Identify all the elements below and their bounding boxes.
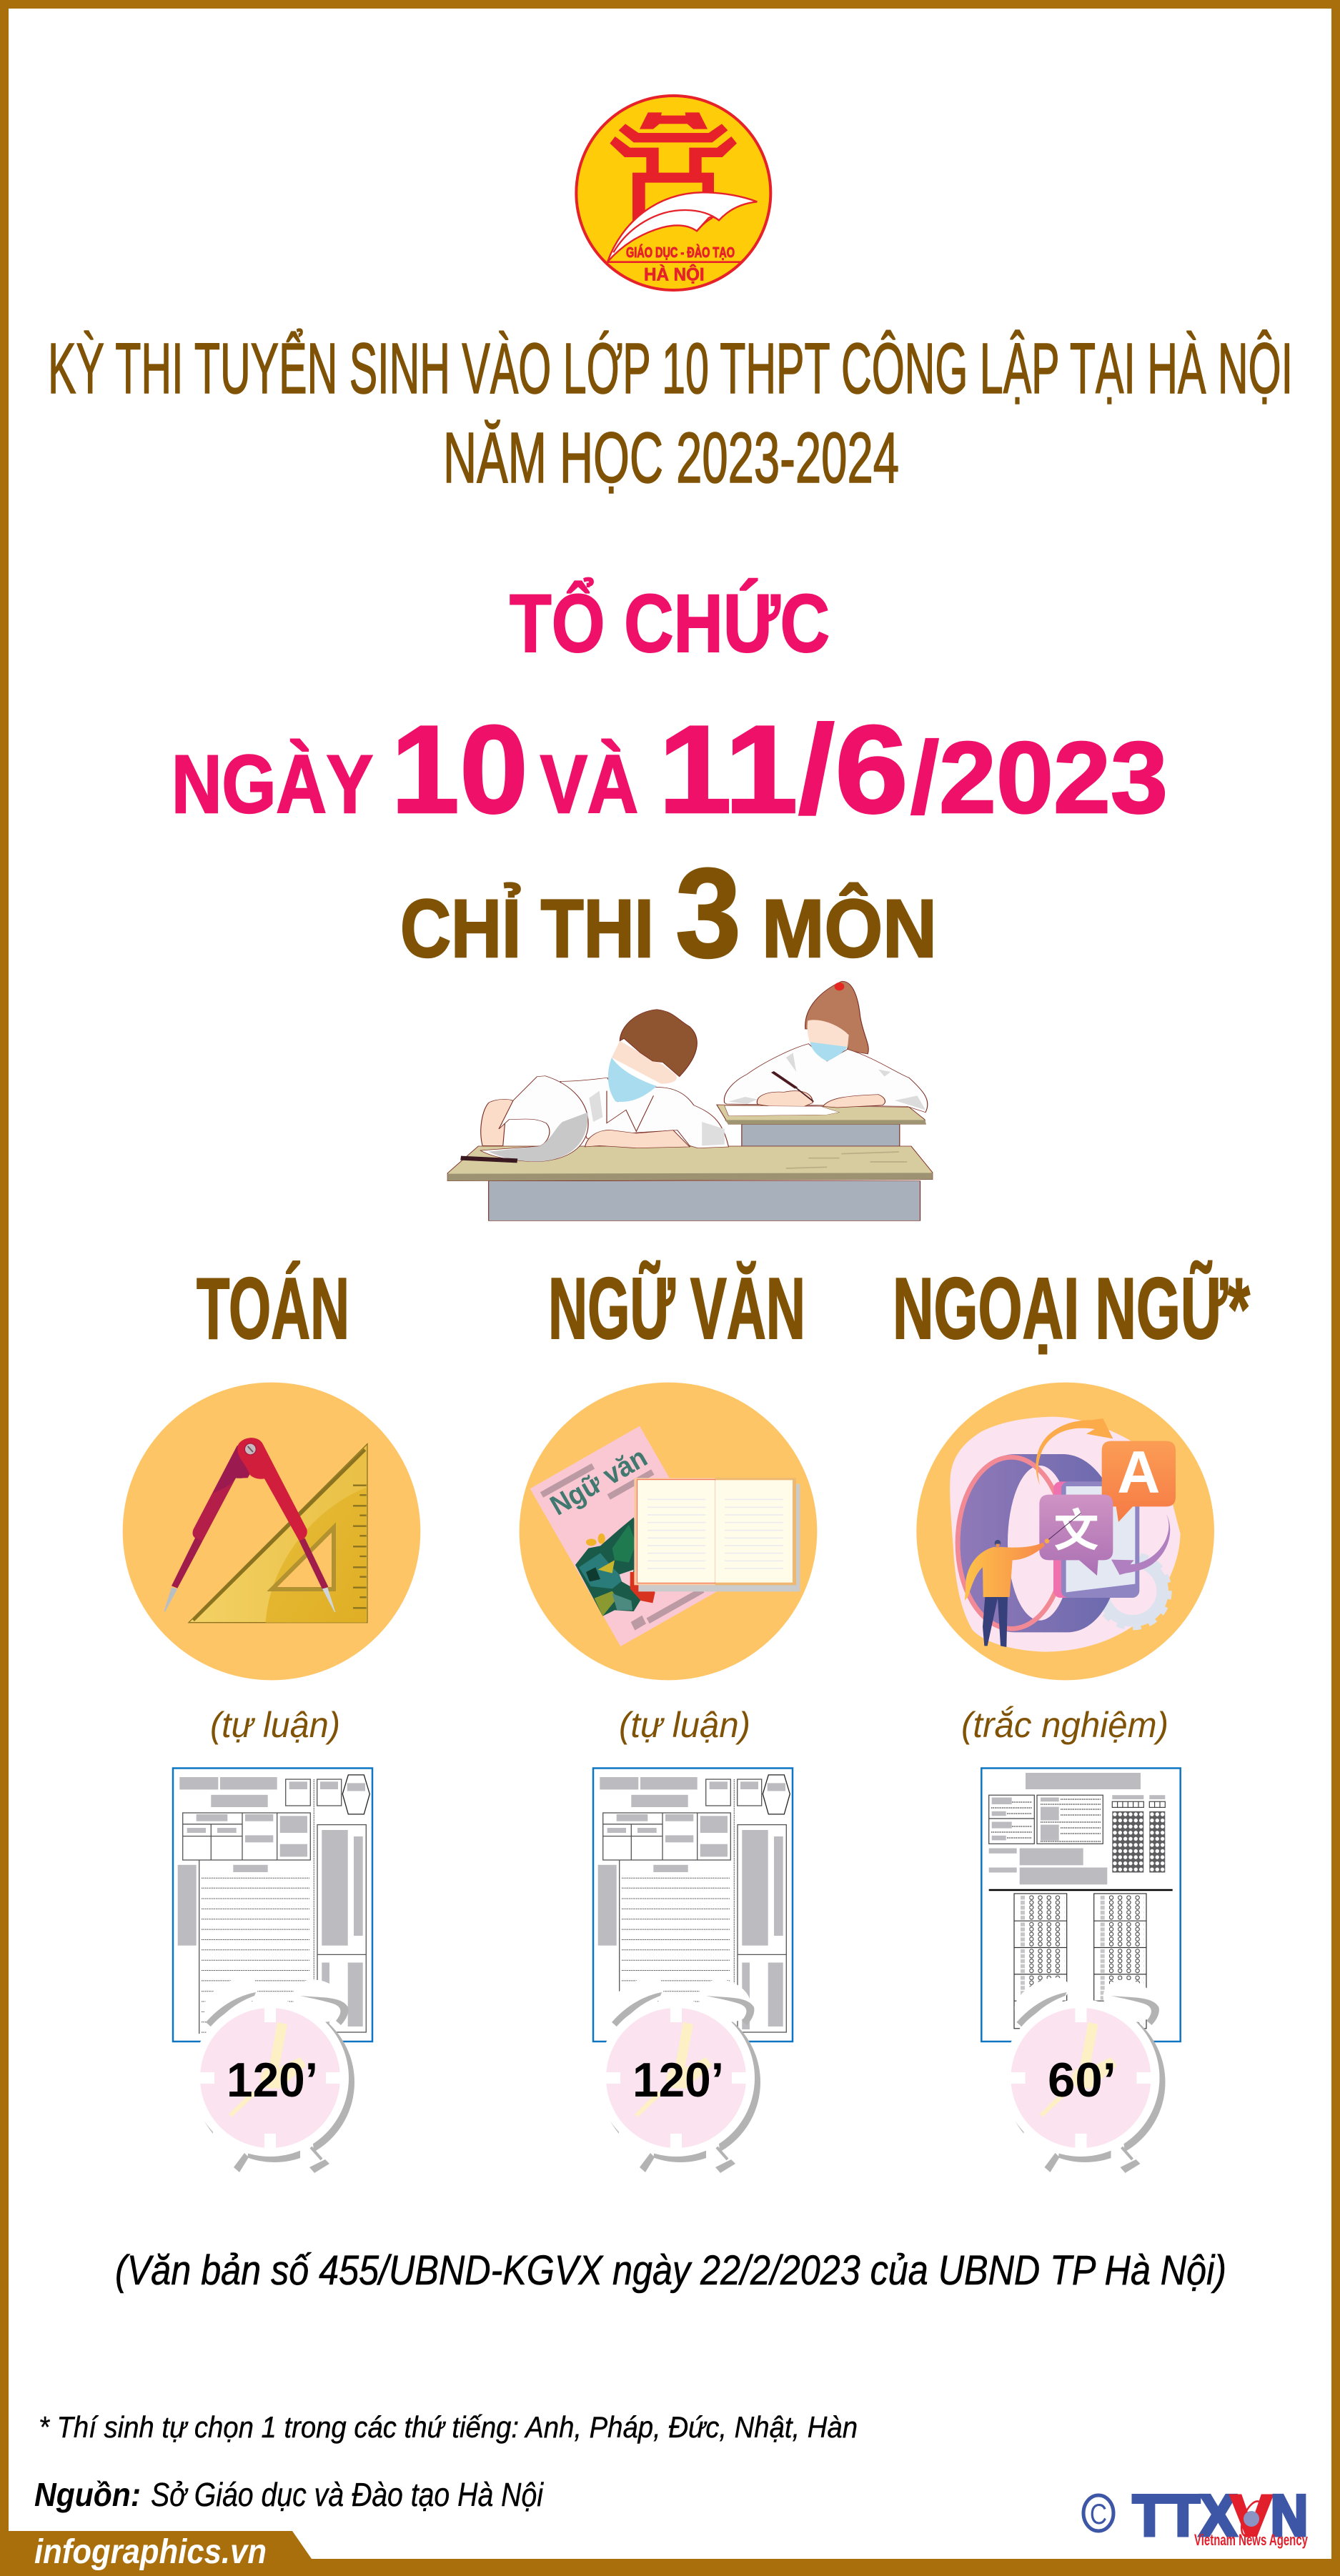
speech bubble: A: A: [1117, 1438, 1160, 1505]
clock: 120 minutes (Toán): [192, 1969, 354, 2173]
headline: exam dates: 10: [391, 700, 528, 840]
exam type label: trắc nghiệm: (trắc nghiệm): [961, 1705, 1168, 1745]
logo: Giáo dục Đào tạo Hà Nội: [576, 96, 770, 290]
clock: 120 minutes (Toán): 120’: [227, 2053, 318, 2107]
website tab: [0, 2531, 312, 2576]
clock: 120 minutes (Ngữ văn): 120’: [632, 2053, 724, 2107]
clock: 120 minutes (Ngữ văn): [597, 1969, 760, 2173]
arrow: orange: [1036, 1418, 1113, 1485]
website tab: infographics.vn: [34, 2533, 267, 2571]
front desk: [447, 1146, 933, 1220]
logo: TTXVN: C: [1090, 2499, 1107, 2530]
icon: literature book: [520, 1383, 817, 1680]
headline: three subjects: [400, 842, 937, 984]
teacher figure: [965, 1513, 1081, 1647]
arrow: purple: [1111, 1513, 1170, 1575]
source: [34, 2476, 545, 2513]
boy student: [461, 1010, 728, 1162]
headline: exam dates: 11/6: [658, 700, 908, 840]
headline: three subjects: MÔN: [762, 882, 937, 975]
headline: three subjects: 3: [675, 842, 741, 984]
exam type label: tự luận (Toán): (tự luận): [210, 1705, 340, 1745]
title: NĂM HỌC 2023-2024: [443, 418, 899, 498]
subject heading: Ngữ văn: NGỮ VĂN: [548, 1260, 805, 1357]
speech bubble: A: [1102, 1438, 1176, 1522]
headline: exam dates: NGÀY: [172, 739, 373, 830]
compass: [164, 1438, 335, 1612]
source: Sở Giáo dục và Đào tạo Hà Nội: [151, 2476, 545, 2513]
logo: TTXVN: N: [1271, 2484, 1308, 2548]
subject heading: Toán: TOÁN: [197, 1260, 349, 1357]
headline: tổ chức: TỔ CHỨC: [510, 578, 830, 670]
answer sheet: Ngữ văn: [593, 1768, 793, 2042]
girl student: [724, 981, 928, 1116]
gear: [1096, 1555, 1169, 1627]
set square: [189, 1444, 367, 1623]
phone: [1053, 1481, 1139, 1598]
logo: TTXVN: V: [1231, 2484, 1272, 2548]
logo: Giáo dục Đào tạo Hà Nội: GIÁO DỤC - ĐÀO TẠO: [626, 244, 735, 261]
clock: 60 minutes (Ngoại ngữ): [1002, 1969, 1165, 2173]
open book: [634, 1478, 800, 1591]
logo: TTXVN: TTX: [1133, 2484, 1236, 2548]
ring: [958, 1454, 1121, 1632]
source: Nguồn:: [34, 2476, 141, 2513]
speech bubble: 文: 文: [1053, 1495, 1099, 1560]
logo: Giáo dục Đào tạo Hà Nội: HÀ NỘI: [644, 265, 705, 285]
headline: exam dates: /2023: [910, 721, 1168, 835]
back desk: [717, 1105, 925, 1146]
logo: TTXVN: [1083, 2484, 1309, 2549]
speech bubble: 文: [1039, 1495, 1113, 1576]
icon: compass and set square: [123, 1383, 420, 1680]
title: [48, 329, 1293, 498]
cover of the Ngữ văn book: Ngữ văn: [545, 1441, 652, 1521]
clock: 60 minutes (Ngoại ngữ): 60’: [1048, 2053, 1116, 2107]
illustration: students taking an exam: [447, 981, 933, 1220]
answer sheet: Ngoại ngữ (multiple choice): [981, 1768, 1181, 2042]
cover of the Ngữ văn book: [530, 1426, 730, 1646]
headline: exam dates: VÀ: [540, 739, 638, 830]
exam type label: tự luận (Ngữ văn): (tự luận): [619, 1705, 750, 1745]
headline: three subjects: CHỈ THI: [400, 883, 654, 975]
icon: foreign languages: [916, 1383, 1214, 1680]
answer sheet: Toán: [173, 1768, 372, 2042]
footnote: * Thí sinh tự chọn 1 trong các thứ tiếng: Anh, Pháp, Đức, Nhật, Hàn: [39, 2410, 858, 2444]
headline: exam dates: [172, 700, 1168, 840]
